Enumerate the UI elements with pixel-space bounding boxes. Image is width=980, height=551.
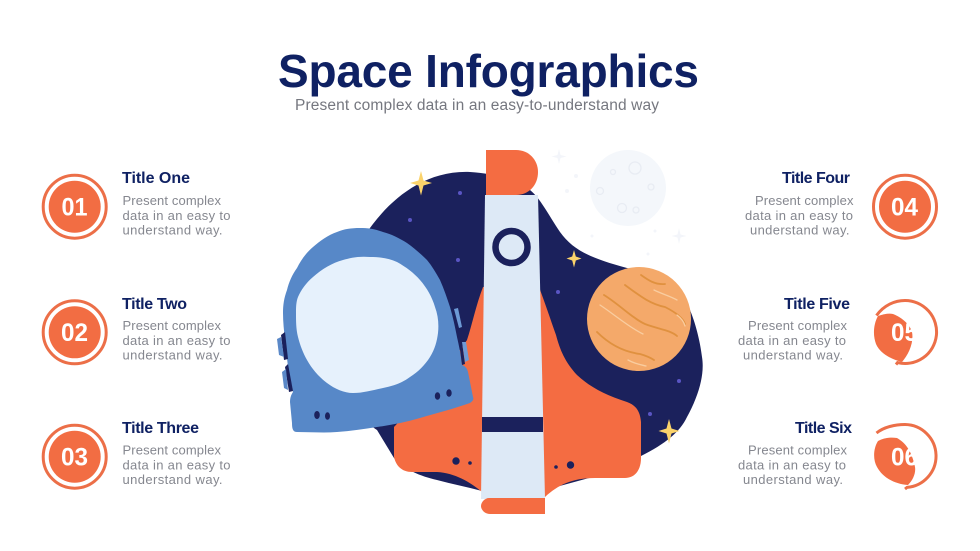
item 04 (745, 170, 936, 238)
helmet vents (314, 389, 452, 420)
text 01: understand way. (122, 222, 222, 238)
background stars and dots (408, 171, 681, 444)
text 01: data in an easy to (122, 208, 230, 223)
rocket wings (394, 287, 641, 497)
rocket band (482, 417, 543, 432)
text 06: understand way. (743, 472, 843, 487)
text 03 (122, 420, 230, 487)
item 01 (43, 170, 230, 238)
jupiter planet (587, 267, 691, 371)
text 02: Present complex (122, 318, 222, 333)
item 02 (43, 296, 230, 364)
text 01 (122, 170, 230, 238)
text 02 (122, 296, 230, 362)
helmet visor (296, 257, 438, 393)
icon 01: 01 (62, 194, 88, 222)
subtitle: Present complex data in an easy-to-understand way (295, 97, 659, 114)
text 03: Title Three (122, 420, 199, 437)
rocket base (481, 498, 545, 514)
rocket window (496, 231, 528, 263)
rocket body (481, 150, 545, 514)
text 04: understand way. (750, 222, 850, 238)
text 05: Present complex (748, 318, 848, 333)
icon 06: 06 (891, 444, 918, 472)
item 05 (738, 296, 937, 364)
text 01: Title One (122, 170, 190, 187)
text 05: data in an easy to (738, 333, 846, 348)
icon 02 (43, 301, 106, 364)
icon 05: 05 (891, 319, 918, 347)
text 04: Present complex (755, 193, 854, 208)
moon (590, 150, 666, 226)
text 02: data in an easy to (122, 333, 230, 348)
navy blob background (350, 172, 703, 491)
faint stars (552, 149, 686, 256)
text 04 (745, 170, 854, 238)
text 06: Present complex (748, 442, 848, 458)
icon 01 (43, 175, 106, 238)
astronaut helmet (277, 228, 473, 432)
text 01: Present complex (122, 193, 222, 208)
text 05: understand way. (743, 348, 843, 362)
text 02: understand way. (122, 348, 222, 362)
text 03: Present complex (122, 442, 222, 458)
helmet shell (283, 228, 473, 432)
icon 03 (43, 425, 106, 488)
text 04: data in an easy to (745, 208, 853, 223)
text 06: data in an easy to (738, 458, 846, 472)
icon 04: 04 (891, 194, 918, 222)
text 06: Title Six (795, 420, 852, 437)
text 03: data in an easy to (122, 458, 230, 472)
text 02: Title Two (122, 296, 187, 313)
icon 03: 03 (61, 444, 88, 472)
title: Space Infographics (278, 45, 699, 97)
rocket hull (481, 195, 545, 499)
rocket nose (486, 150, 538, 195)
icon 02: 02 (61, 319, 88, 347)
text 06 (738, 420, 852, 487)
item 03 (43, 420, 230, 488)
icon 06 (874, 424, 936, 489)
text 04: Title Four (782, 170, 850, 187)
helmet side tabs (277, 308, 469, 392)
text 05: Title Five (784, 296, 850, 313)
icon 04 (874, 175, 936, 238)
central illustration (277, 149, 703, 514)
item 06 (738, 420, 936, 489)
text 03: understand way. (122, 472, 222, 487)
icon 05 (874, 300, 937, 364)
text 05 (738, 296, 850, 362)
